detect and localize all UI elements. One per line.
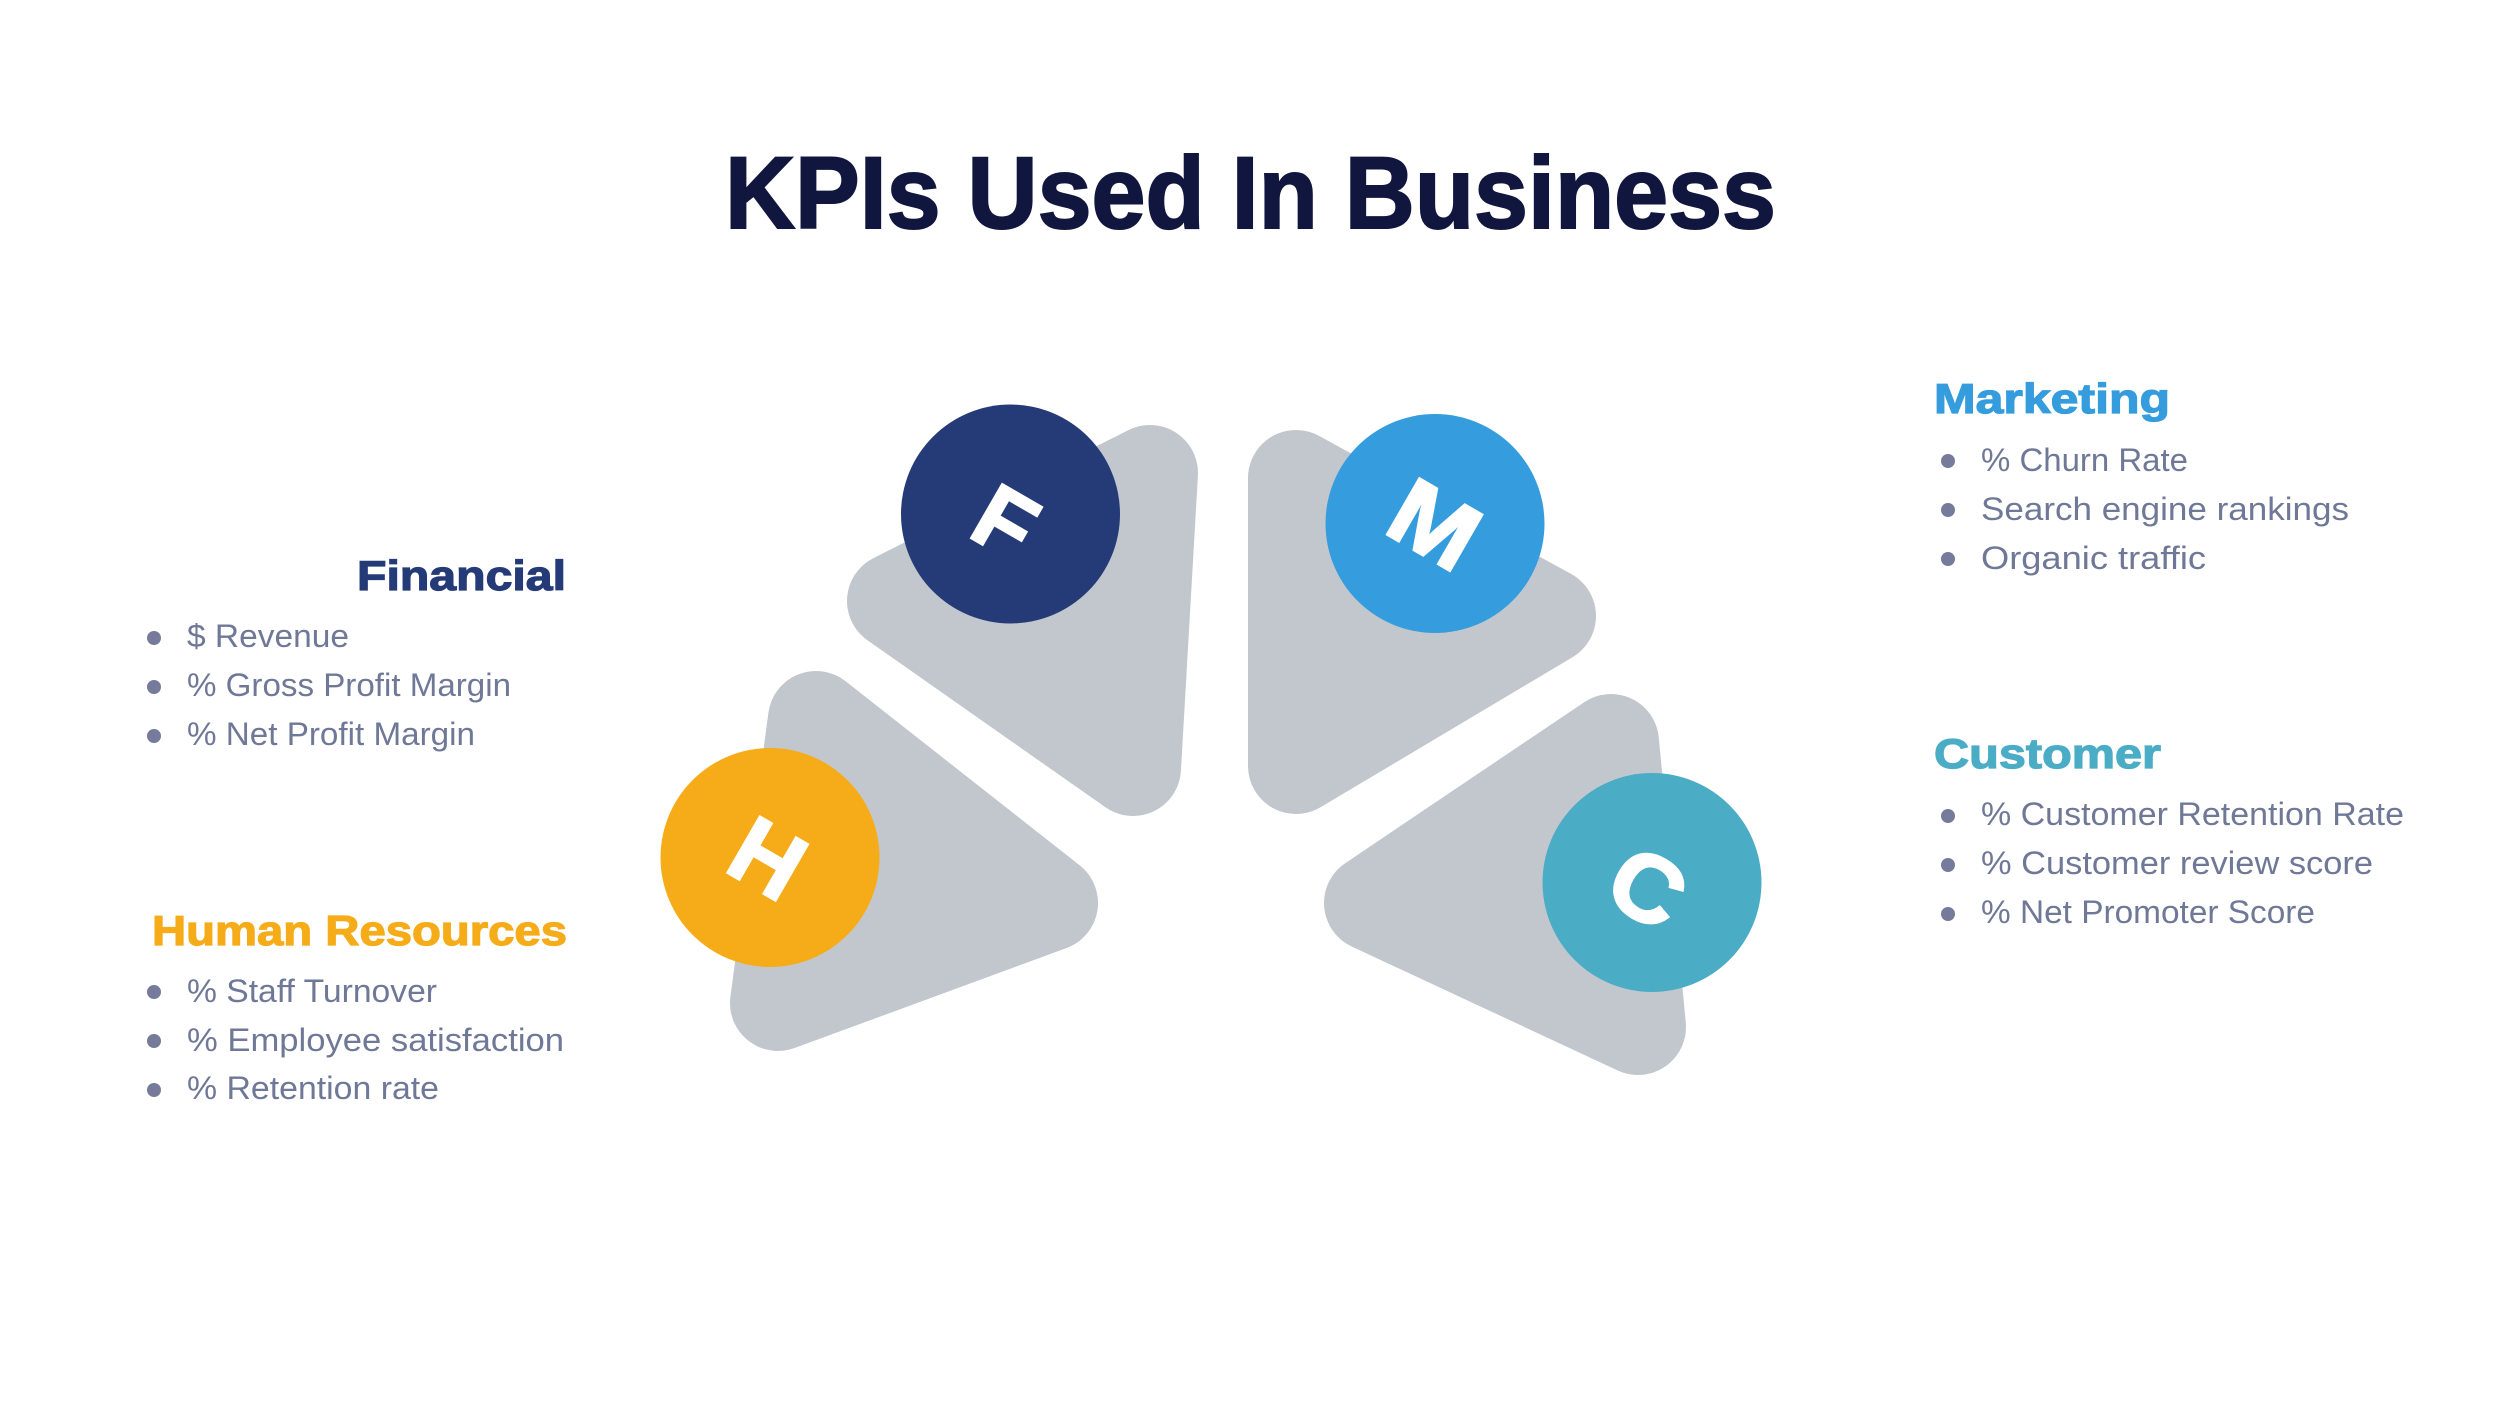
list item: search engine rankings: Search engine rankings xyxy=(1981,491,2349,527)
badge: M: M xyxy=(1371,457,1498,591)
segment: customer triangle xyxy=(1372,742,1638,1027)
segment: human resources triangle xyxy=(778,719,1050,1003)
panel: customer xyxy=(1934,730,2404,930)
list item: retention rate: % Retention rate xyxy=(187,1070,439,1106)
list item: employee satisfaction: % Employee satisfaction xyxy=(187,1022,564,1058)
list item: gross profit margin: % Gross Profit Margin xyxy=(187,667,511,703)
badge: H xyxy=(660,748,880,967)
badge: F: F xyxy=(956,466,1054,580)
list item: revenue: $ Revenue xyxy=(187,618,349,654)
badge: C: C xyxy=(1590,824,1704,951)
segment: marketing triangle xyxy=(1296,478,1548,766)
segment: financial triangle xyxy=(895,473,1150,768)
list item: net profit margin: % Net Profit Margin xyxy=(187,716,475,752)
panel: financial xyxy=(147,552,566,752)
list item: staff turnover: % Staff Turnover xyxy=(187,973,437,1009)
heading: marketing: Marketing xyxy=(1934,375,2170,422)
list item: net promoter score: % Net Promoter Score xyxy=(1981,894,2315,930)
list item: customer review score: % Customer review score xyxy=(1981,845,2373,881)
heading: human resources: Human Resources xyxy=(152,907,567,954)
diagram: four KPI segments xyxy=(660,404,1762,1027)
panel: marketing xyxy=(1934,375,2349,576)
list item: churn rate: % Churn Rate xyxy=(1981,442,2188,478)
badge: M xyxy=(1326,414,1544,633)
heading: customer: Customer xyxy=(1934,730,2161,777)
title: KPIs Used In Business xyxy=(725,136,1776,250)
heading: financial: Financial xyxy=(357,552,566,599)
badge: H: H xyxy=(712,796,823,921)
badge: C xyxy=(1542,773,1762,992)
list item: organic traffic: Organic traffic xyxy=(1981,540,2206,576)
panel: human resources xyxy=(147,907,567,1106)
list item: customer retention rate: % Customer Retention Rate xyxy=(1981,796,2404,832)
badge: F xyxy=(901,404,1120,624)
